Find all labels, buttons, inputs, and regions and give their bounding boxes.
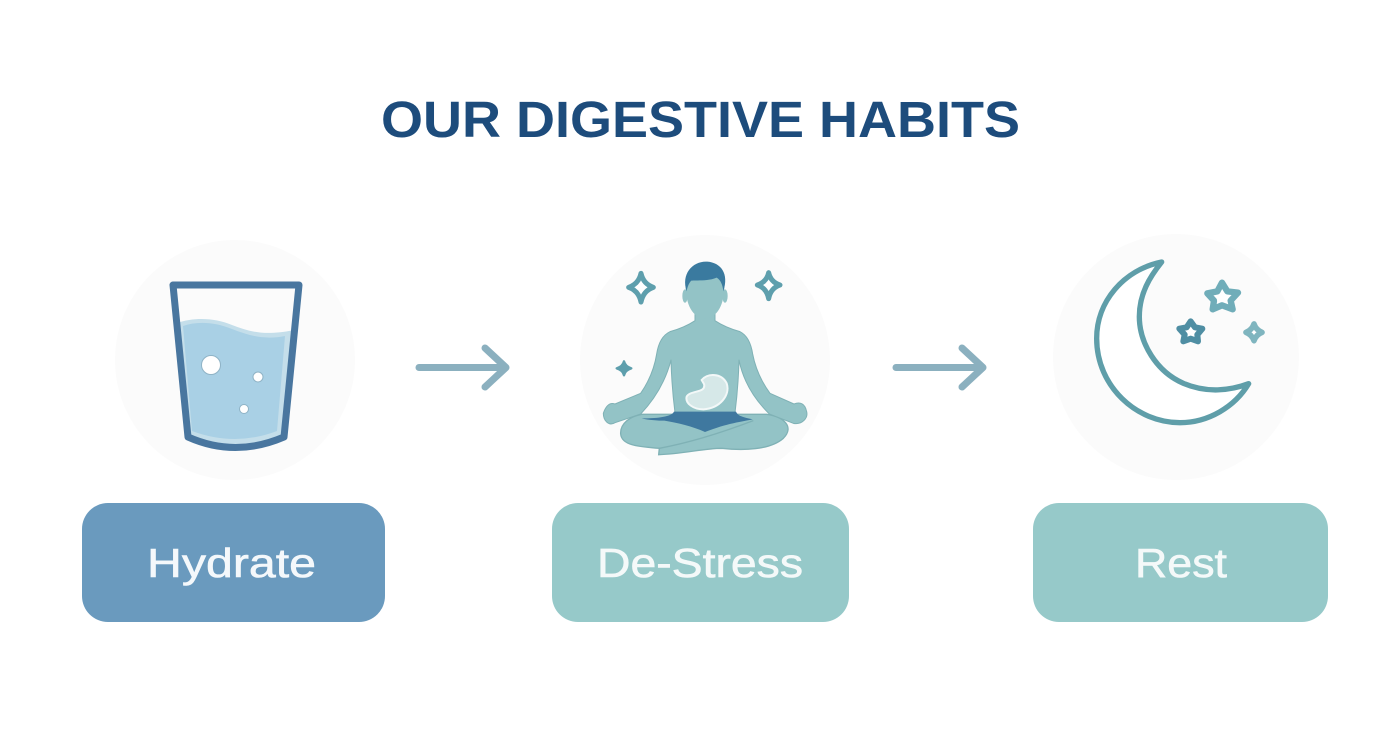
legs bbox=[621, 414, 788, 455]
shorts bbox=[642, 412, 753, 432]
head bbox=[686, 275, 724, 318]
title: OUR DIGESTIVE HABITS bbox=[381, 91, 1020, 148]
panel: de-stress step bbox=[552, 235, 849, 622]
sparkle: upper right bbox=[757, 273, 780, 299]
button: Hydrate bbox=[82, 503, 385, 622]
panel: rest step bbox=[1033, 234, 1328, 622]
button: De-Stress: De-Stress bbox=[597, 540, 803, 586]
button: Hydrate: Hydrate bbox=[147, 540, 316, 586]
icon: moon and stars bbox=[1097, 262, 1262, 423]
sparkle: upper left bbox=[629, 273, 653, 302]
stomach bbox=[686, 375, 728, 409]
large star bbox=[1207, 283, 1238, 309]
crossed leg line bbox=[659, 421, 753, 448]
torso and arms bbox=[603, 310, 807, 424]
ear left bbox=[682, 289, 688, 303]
hair bbox=[685, 262, 725, 291]
icon: meditating person bbox=[603, 262, 807, 455]
icon backdrop: hydrate circle bbox=[115, 240, 355, 480]
button: De-Stress bbox=[552, 503, 849, 622]
icon backdrop: de-stress circle bbox=[580, 235, 830, 485]
arrow: de-stress to rest bbox=[896, 348, 983, 387]
medium star bbox=[1179, 321, 1202, 341]
sparkle: small left bbox=[617, 361, 631, 375]
small sparkle bbox=[1246, 324, 1262, 341]
panel: hydrate step bbox=[82, 240, 385, 622]
crescent moon bbox=[1097, 262, 1249, 423]
arrow: hydrate to de-stress bbox=[419, 348, 506, 387]
button: Rest bbox=[1033, 503, 1328, 622]
icon: glass of water bbox=[173, 285, 299, 448]
icon backdrop: rest circle bbox=[1053, 234, 1299, 480]
button: Rest: Rest bbox=[1135, 540, 1228, 586]
ear right bbox=[722, 289, 728, 303]
